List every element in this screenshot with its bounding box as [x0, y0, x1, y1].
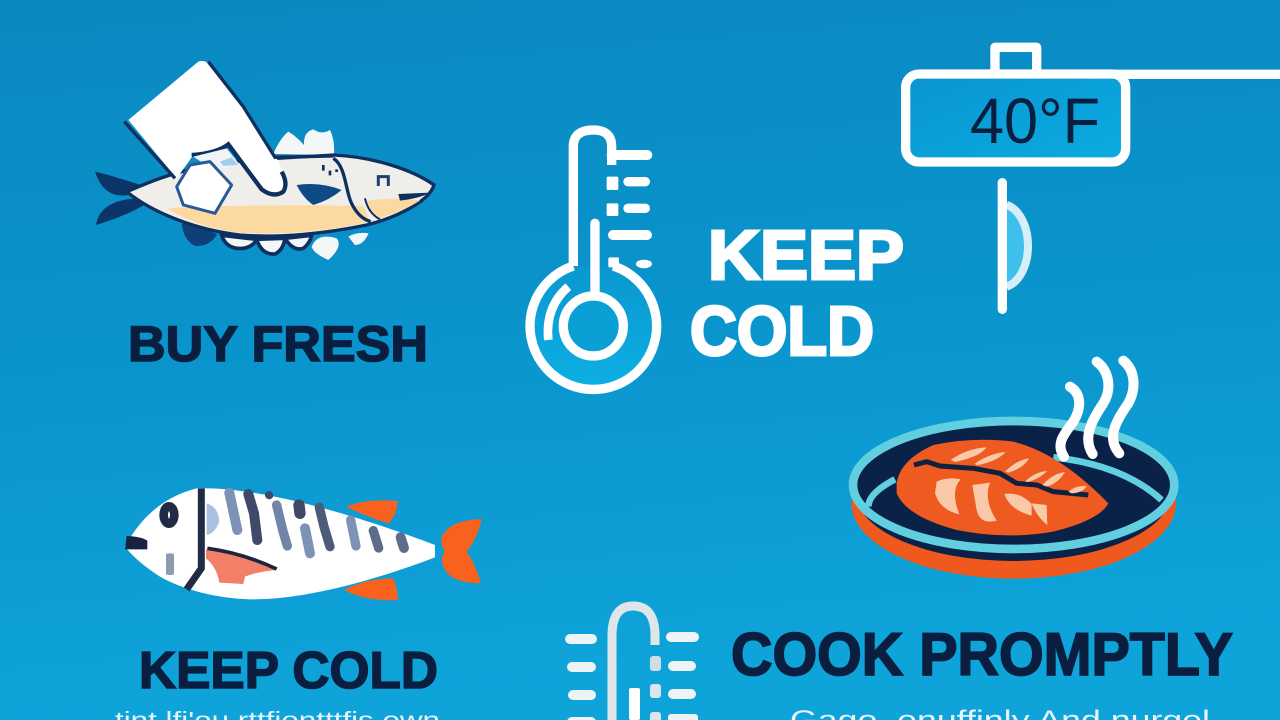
heading: keep cold white: KEEP: [708, 216, 904, 294]
icon: hand holding fresh fish with ice: [95, 61, 434, 260]
icon: striped fish: [125, 488, 482, 600]
heading: buy fresh: BUY FRESH: [128, 316, 428, 372]
icon: digital probe thermometer: [906, 47, 1280, 309]
heading: keep cold white: [690, 216, 904, 370]
temperature reading: 40°F: [970, 85, 1100, 157]
heading: cook promptly: COOK PROMPTLY: [731, 621, 1233, 688]
heading: keep cold dark: KEEP COLD: [139, 642, 438, 700]
icon: small thermometer: [565, 606, 699, 720]
icon: thermometer: [530, 130, 657, 389]
icon: salmon in pan with steam: [851, 361, 1176, 579]
heading: keep cold white: COLD: [690, 292, 874, 370]
